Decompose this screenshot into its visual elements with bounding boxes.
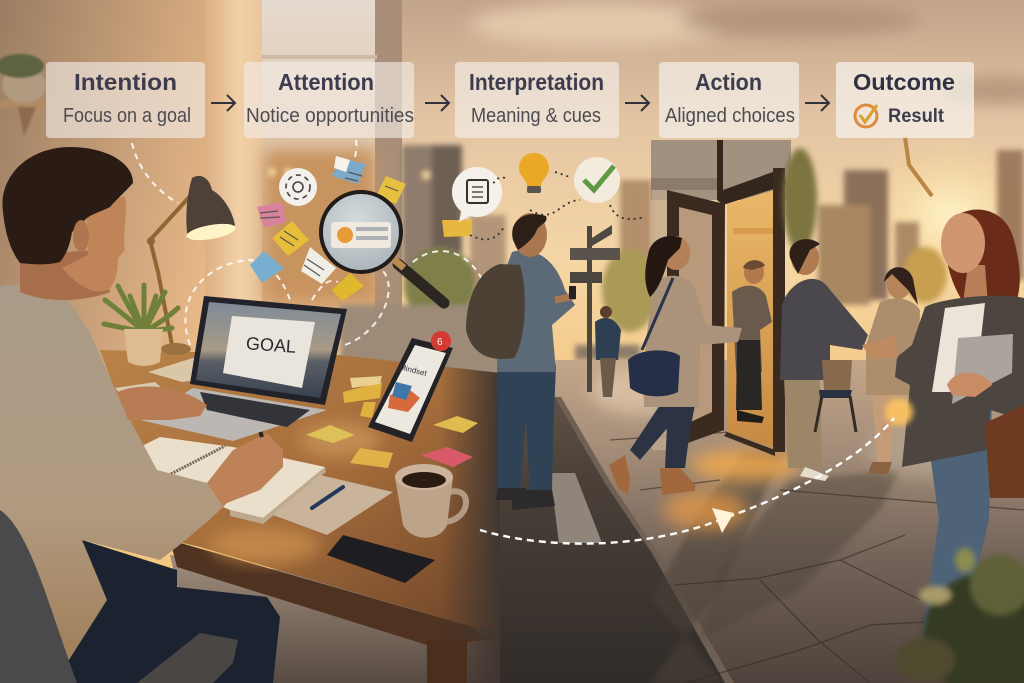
arrow: interpretation to action: [625, 95, 649, 111]
potted plant: [104, 285, 178, 366]
tablet: 6: [437, 337, 443, 348]
man with backpack: [466, 213, 576, 510]
icon: result check: [855, 105, 877, 127]
smiling woman with tablet: [862, 209, 1024, 633]
distant pedestrian: [595, 306, 621, 397]
arrow: intention to attention: [211, 95, 235, 111]
step panel: interpretation: [455, 62, 619, 138]
floor under table: [170, 555, 500, 683]
coffee mug: [395, 464, 466, 538]
arrow: action to outcome: [805, 95, 829, 111]
step panel: outcome: [836, 62, 974, 138]
jeans: [60, 540, 280, 683]
arrow: attention to interpretation: [425, 95, 449, 111]
wooden table: [100, 350, 500, 683]
person at desk: [0, 147, 283, 683]
crane: [905, 137, 932, 196]
icon: green check bubble: [574, 157, 620, 203]
writing hand and forearm: [207, 433, 283, 507]
dashed connectors: [132, 140, 487, 345]
step panel: intention: [46, 62, 205, 138]
step panel: attention: [244, 62, 414, 138]
dashed path with arrow: [480, 398, 913, 544]
ground: street and pavement: [450, 360, 1024, 683]
step panel: outcome: Result: [888, 106, 945, 127]
foreground foliage: [895, 548, 1024, 683]
step panel: interpretation: Interpretation: [469, 69, 604, 95]
interpretation icons: [452, 153, 645, 239]
smartphone: [327, 535, 435, 583]
neck and face: [20, 250, 110, 300]
man shaking hands: [780, 239, 868, 481]
hair: [2, 147, 133, 264]
step panel: action: [659, 62, 799, 138]
entrance building: [651, 140, 817, 456]
tablet: [368, 331, 453, 442]
man inside doorway: [732, 260, 772, 423]
step panel: intention: Intention: [74, 69, 177, 95]
desk lamp: [147, 176, 237, 355]
wall shelf with plant: [0, 54, 46, 136]
sticky notes on desk: [306, 376, 478, 468]
notepad and pen: [273, 475, 393, 535]
step panel: action: Action: [695, 69, 762, 95]
sweater: [0, 285, 223, 663]
ear: [73, 220, 89, 252]
woman walking: [609, 236, 742, 495]
street sign post: [570, 225, 620, 392]
laptop: GOAL: [245, 333, 297, 357]
outdoor chair: [815, 360, 856, 432]
notebook: [140, 437, 326, 524]
step panel: outcome: Outcome: [853, 69, 955, 95]
icon: light bulb: [519, 153, 549, 193]
icon: clipboard bubble: [452, 167, 502, 222]
step panel: attention: Notice opportunities: [246, 105, 414, 127]
step panel: intention: Focus on a goal: [63, 105, 191, 127]
step panel: attention: Attention: [278, 69, 374, 95]
typing hand: [118, 386, 207, 420]
chair: [0, 510, 77, 683]
laptop: [140, 296, 347, 441]
step panel: interpretation: Meaning & cues: [471, 105, 601, 127]
woman in tan blazer: [866, 267, 920, 474]
step panel: action: Aligned choices: [665, 105, 795, 127]
floating notes and icons: attention: [250, 156, 472, 301]
icon: settings circle: [279, 168, 317, 206]
icon: magnifying glass: [321, 192, 444, 303]
tablet: Mindset: [398, 362, 428, 378]
